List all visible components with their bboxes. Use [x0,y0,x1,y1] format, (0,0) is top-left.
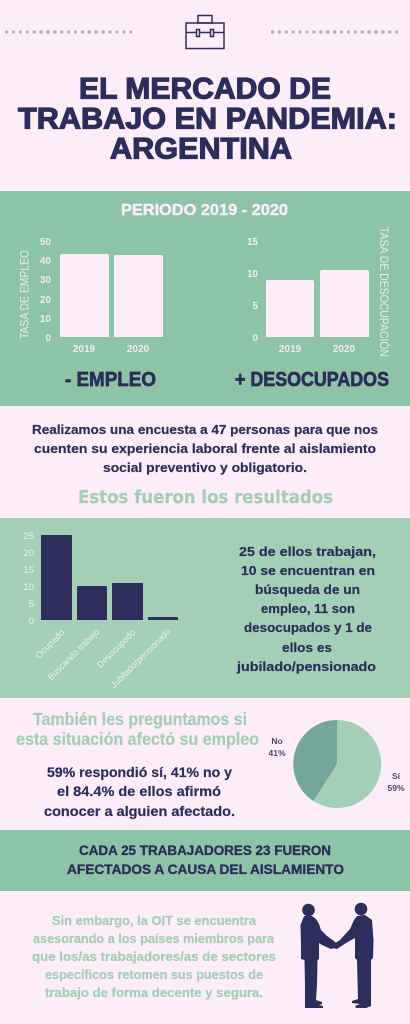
bar chart: situacion laboral: Ocupado [33,627,66,661]
text block: porcentajes [44,764,235,819]
pie chart: afectacion: Sí [392,771,401,781]
bar chart: tasa de empleo: 30 [40,275,51,286]
bar chart: tasa de empleo: 50 [40,237,51,248]
panel: resultados [0,518,410,698]
banner: cada 25 trabajadores [0,830,410,891]
text block: OIT: trabajo de forma decente y segura. [45,985,263,1000]
icon: handshake silhouette [300,903,374,1008]
pie chart: afectacion [268,720,405,808]
bar chart: tasa de empleo: 0 [45,333,51,344]
label: menos empleo: - EMPLEO [65,369,156,391]
bar chart: situacion laboral: 10 [23,582,34,593]
title [18,72,397,166]
heading: afecto su empleo: También les preguntamos si [33,709,247,729]
bar chart: situacion laboral: Jubilado/pensionado [109,626,172,690]
bar chart: tasa de desocupacion: 15 [247,237,258,248]
bar chart: situacion laboral: 20 [23,548,34,559]
bar chart: tasa de empleo: 10 [40,314,51,325]
bar chart: situacion laboral [23,531,178,690]
bar chart: tasa de desocupacion: TASA DE DESOCUPACIÓN [377,227,392,357]
text block: resultados: 25 de ellos trabajan, [239,544,376,559]
text block: resultados: 10 se encuentran en [241,563,375,578]
bar chart: tasa de empleo: 20 [40,295,51,306]
panel: periodo 2019-2020 [0,191,410,406]
text block: OIT: Sin embargo, la OIT se encuentra [52,913,257,928]
banner: cada 25 trabajadores: CADA 25 TRABAJADORES 23 FUERON [79,843,331,858]
text block: resultados: búsqueda de un [255,582,360,597]
bar chart: tasa de desocupacion [247,227,392,357]
text block: porcentajes: conocer a alguien afectado. [44,803,235,819]
bar chart: tasa de desocupacion: 2019 [279,344,302,355]
header dotted rule right [271,30,402,34]
bar chart: situacion laboral: Desocupado [95,627,137,670]
text block: OIT: que los/as trabajadores/as de sectores [32,949,276,964]
title: TRABAJO EN PANDEMIA: [18,102,397,136]
bar chart: tasa de empleo: TASA DE EMPLEO [18,250,32,339]
text block: resultados: desocupados y 1 de [244,620,372,635]
text block: encuesta: social preventivo y obligatorio. [103,460,307,475]
text block: resultados [236,544,376,674]
bar chart: situacion laboral: 0 [29,616,34,627]
text block: encuesta [32,422,378,475]
title: ARGENTINA [110,132,292,166]
bar chart: tasa de empleo [18,237,163,355]
pie chart: afectacion: 41% [268,748,286,758]
bar chart: tasa de desocupacion: 5 [252,301,258,312]
pie chart: afectacion: 59% [387,783,405,793]
bar chart: tasa de empleo: 2020 [127,344,150,355]
banner: cada 25 trabajadores: AFECTADOS A CAUSA DEL AISLAMIENTO [67,862,344,877]
text block: resultados: empleo, 11 son [261,601,355,616]
text block: encuesta: Realizamos una encuesta a 47 personas para que nos [32,422,378,437]
bar chart: tasa de empleo: 2019 [73,344,96,355]
text block: porcentajes: 59% respondió sí, 41% no y [47,764,232,780]
icon: briefcase [186,16,224,48]
text block: porcentajes: el 84.4% de ellos afirmó [57,783,221,799]
bar chart: situacion laboral: 15 [23,565,34,576]
label: mas desocupados: + DESOCUPADOS [235,369,389,391]
bar chart: situacion laboral: 5 [29,599,34,610]
heading: afecto su empleo [16,709,259,749]
text block: OIT: asesorando a los países miembros para [33,931,275,946]
text block: resultados: jubilado/pensionado [236,659,376,674]
heading: resultados: Estos fueron los resultados [78,487,333,508]
bar chart: situacion laboral: Buscando trabajo [46,626,101,682]
panel heading: PERIODO 2019 - 2020 [121,202,288,219]
pie chart: afectacion: No [271,736,283,746]
bar chart: situacion laboral: 25 [23,531,34,542]
text block: OIT [32,913,276,1000]
bar chart: tasa de desocupacion: 2020 [333,344,356,355]
bar chart: tasa de desocupacion: 0 [252,333,258,344]
bar chart: tasa de empleo: 40 [40,256,51,267]
title: EL MERCADO DE [79,72,331,106]
text block: resultados: ellos es [282,640,332,655]
bar chart: tasa de desocupacion: 10 [247,269,258,280]
text block: OIT: específicos retomen sus puestos de [45,967,263,982]
header dotted rule left [5,30,136,34]
text block: encuesta: cuenten su experiencia laboral frente al aislamiento [34,441,376,456]
heading: afecto su empleo: esta situación afectó su empleo [16,729,259,749]
